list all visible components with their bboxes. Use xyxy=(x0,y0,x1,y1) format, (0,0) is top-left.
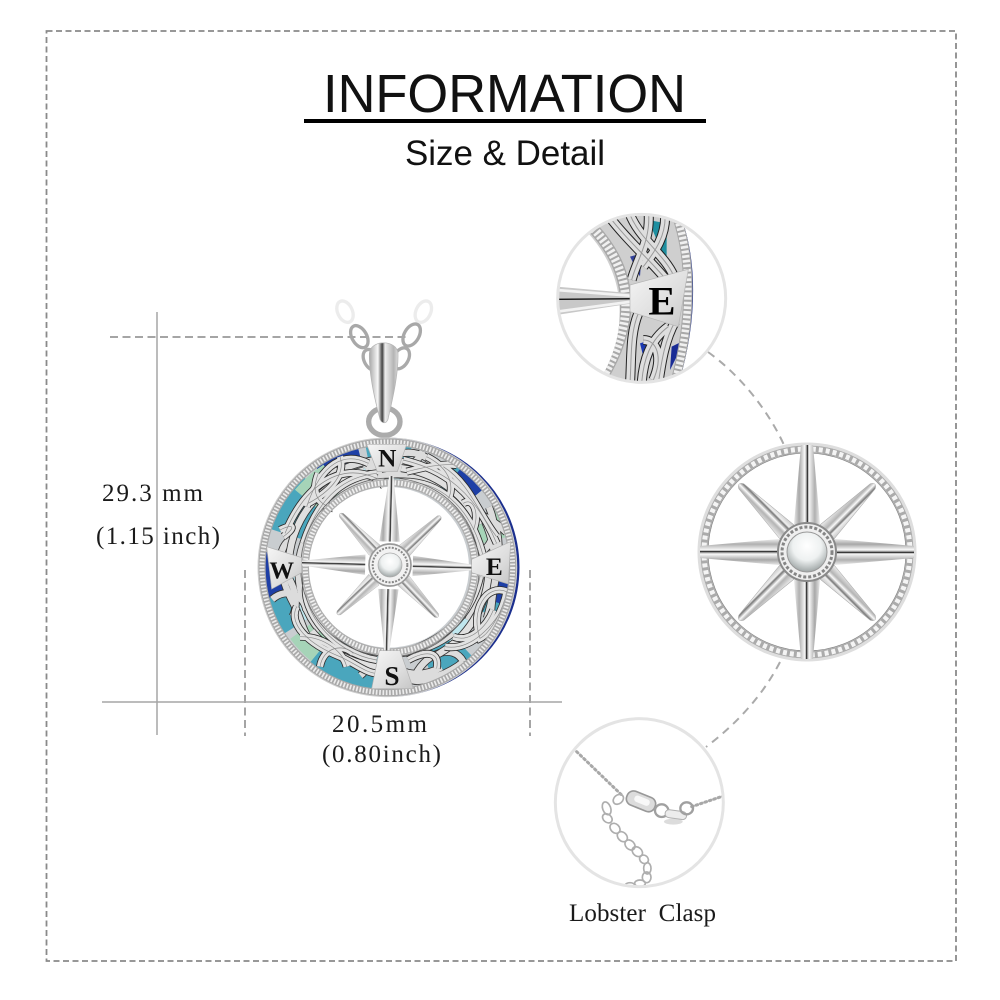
S plaque: S xyxy=(384,661,400,691)
detail circle: compass star xyxy=(699,444,915,660)
chain xyxy=(577,752,723,807)
height label: (1.15 inch) xyxy=(96,523,220,550)
ring band with abalone shell xyxy=(263,440,518,695)
W plaque xyxy=(267,547,302,589)
detail ring xyxy=(555,719,723,887)
height label: 29.3 mm xyxy=(102,480,204,507)
celtic knot strands xyxy=(237,413,553,727)
E plaque xyxy=(472,542,511,584)
title underline xyxy=(304,119,706,123)
N plaque xyxy=(367,444,407,473)
N plaque: N xyxy=(378,445,396,473)
detail circle: E plaque xyxy=(557,207,726,393)
detail circle: lobster clasp xyxy=(555,719,723,888)
star arms xyxy=(700,445,914,659)
lobster clasp xyxy=(624,789,693,825)
width dimension lines xyxy=(102,570,562,736)
width label: (0.80inch) xyxy=(322,741,441,768)
width label xyxy=(322,711,441,768)
extender chain xyxy=(601,792,651,888)
center gem xyxy=(369,544,411,586)
needle xyxy=(559,287,630,314)
subtitle: Size & Detail xyxy=(405,134,605,173)
width label: 20.5mm xyxy=(332,711,428,738)
connector: middle detail to clasp detail xyxy=(706,662,780,747)
E plaque: E xyxy=(486,553,503,581)
rope rim xyxy=(699,444,915,660)
detail ring xyxy=(558,214,726,382)
detail band xyxy=(559,216,694,381)
height dimension lines xyxy=(110,312,408,735)
center gem xyxy=(778,523,836,581)
height label xyxy=(96,480,220,550)
compass pendant xyxy=(237,298,553,727)
jump ring xyxy=(369,408,400,435)
connector: top detail to middle detail xyxy=(708,352,784,445)
detail band: E xyxy=(648,278,676,323)
W plaque: W xyxy=(269,558,294,585)
title: INFORMATION xyxy=(323,64,686,124)
plaque xyxy=(630,269,688,327)
compass star xyxy=(297,474,481,657)
beaded rims xyxy=(258,438,517,697)
S plaque xyxy=(372,651,413,691)
bail xyxy=(369,343,398,423)
necklace chain xyxy=(334,298,435,373)
clasp caption: Lobster Clasp xyxy=(569,900,716,927)
